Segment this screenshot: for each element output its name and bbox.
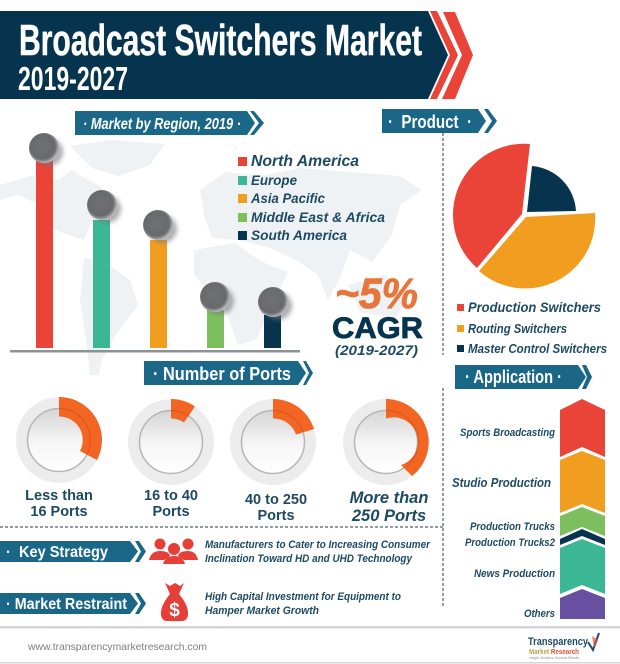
bar: middle east and africa (200, 282, 234, 348)
logo: transparency market research (528, 633, 599, 660)
banner: key strategy: · Key Strategy (6, 544, 108, 561)
title banner: 2019-2027 (18, 60, 128, 97)
legend: regions (238, 153, 385, 243)
logo: transparency market research: Insight. Analytics. Success Results (529, 656, 579, 660)
donut: more than 250 ports (343, 399, 429, 525)
application labels: Production Trucks (470, 521, 555, 533)
heading: product: · Product · (388, 112, 472, 132)
label: Ports (257, 508, 295, 524)
application labels: Studio Production (452, 475, 551, 490)
donut: 16 to 40 ports (128, 399, 214, 520)
logo: transparency market research: Market Research (529, 649, 579, 656)
icon: money bag: $ (169, 600, 180, 621)
heading: market by region: · Market by Region, 2019 · (83, 116, 241, 133)
bar: europe (87, 190, 121, 348)
segment: sports broadcasting (560, 399, 605, 457)
label: Ports (152, 504, 190, 520)
restraint text: Hamper Market Growth (205, 605, 319, 617)
callout: cagr: ~5% (335, 270, 418, 318)
slice: master control switchers (527, 166, 576, 212)
restraint text: High Capital Investment for Equipment to (205, 591, 401, 603)
donut: 40 to 250 ports (230, 399, 316, 524)
banner: key strategy (0, 541, 146, 562)
application labels: Others (524, 608, 555, 620)
strategy text (205, 539, 431, 565)
heading: number of ports: · Number of Ports (153, 364, 291, 384)
segment: production trucks 2 (560, 529, 605, 545)
bar: south america (258, 287, 292, 348)
logo: transparency market research: Transparency (528, 636, 589, 648)
label: More than (350, 489, 428, 507)
label: 40 to 250 (245, 492, 307, 508)
legend: product: Production Switchers (468, 299, 601, 315)
donut: less than 16 ports (16, 397, 102, 520)
heading: market by region (75, 111, 264, 135)
label: 250 Ports (351, 507, 426, 525)
segment: production trucks (560, 507, 605, 536)
label: 16 Ports (30, 504, 88, 520)
application labels: News Production (474, 568, 555, 580)
callout: cagr: (2019-2027) (335, 342, 418, 358)
pie chart: product (453, 144, 595, 288)
legend: regions: Europe (251, 172, 297, 188)
legend: product: Routing Switchers (468, 322, 567, 336)
legend: regions: North America (251, 153, 359, 170)
stacked arrow: application (560, 399, 605, 619)
legend: regions: South America (251, 227, 347, 243)
bar chart: market by region (10, 133, 300, 352)
title text: Broadcast Switchers Market (19, 16, 422, 65)
icon: money bag (161, 583, 188, 621)
label: Less than (25, 488, 93, 504)
legend: regions: Middle East & Africa (251, 209, 385, 225)
legend: product: Master Control Switchers (468, 342, 607, 356)
legend: product (457, 299, 607, 356)
application labels (452, 427, 555, 620)
strategy text: Inclination Toward HD and UHD Technology (205, 553, 413, 565)
strategy text: Manufacturers to Cater to Increasing Consumer (205, 539, 431, 551)
slice: production switchers (453, 144, 530, 268)
title banner (0, 11, 473, 99)
legend: regions: Asia Pacific (250, 190, 325, 206)
segment: others (560, 589, 605, 619)
application labels: Sports Broadcasting (460, 427, 555, 439)
restraint text (205, 591, 401, 617)
label: 16 to 40 (144, 488, 198, 504)
icon: people (149, 538, 198, 564)
footer url: www.transparencymarketresearch.com (27, 641, 207, 653)
application labels: Production Trucks2 (465, 537, 555, 549)
callout: cagr (332, 270, 423, 358)
bar: asia pacific (143, 210, 177, 348)
slice: routing switchers (479, 213, 595, 288)
callout: cagr: CAGR (332, 312, 423, 345)
world map background (0, 140, 422, 375)
heading: application: · Application · (465, 367, 562, 387)
segment: news production (560, 539, 605, 594)
banner: market restraint: · Market Restraint (6, 596, 127, 613)
bar: north america (29, 133, 63, 348)
segment: studio production (560, 451, 605, 513)
